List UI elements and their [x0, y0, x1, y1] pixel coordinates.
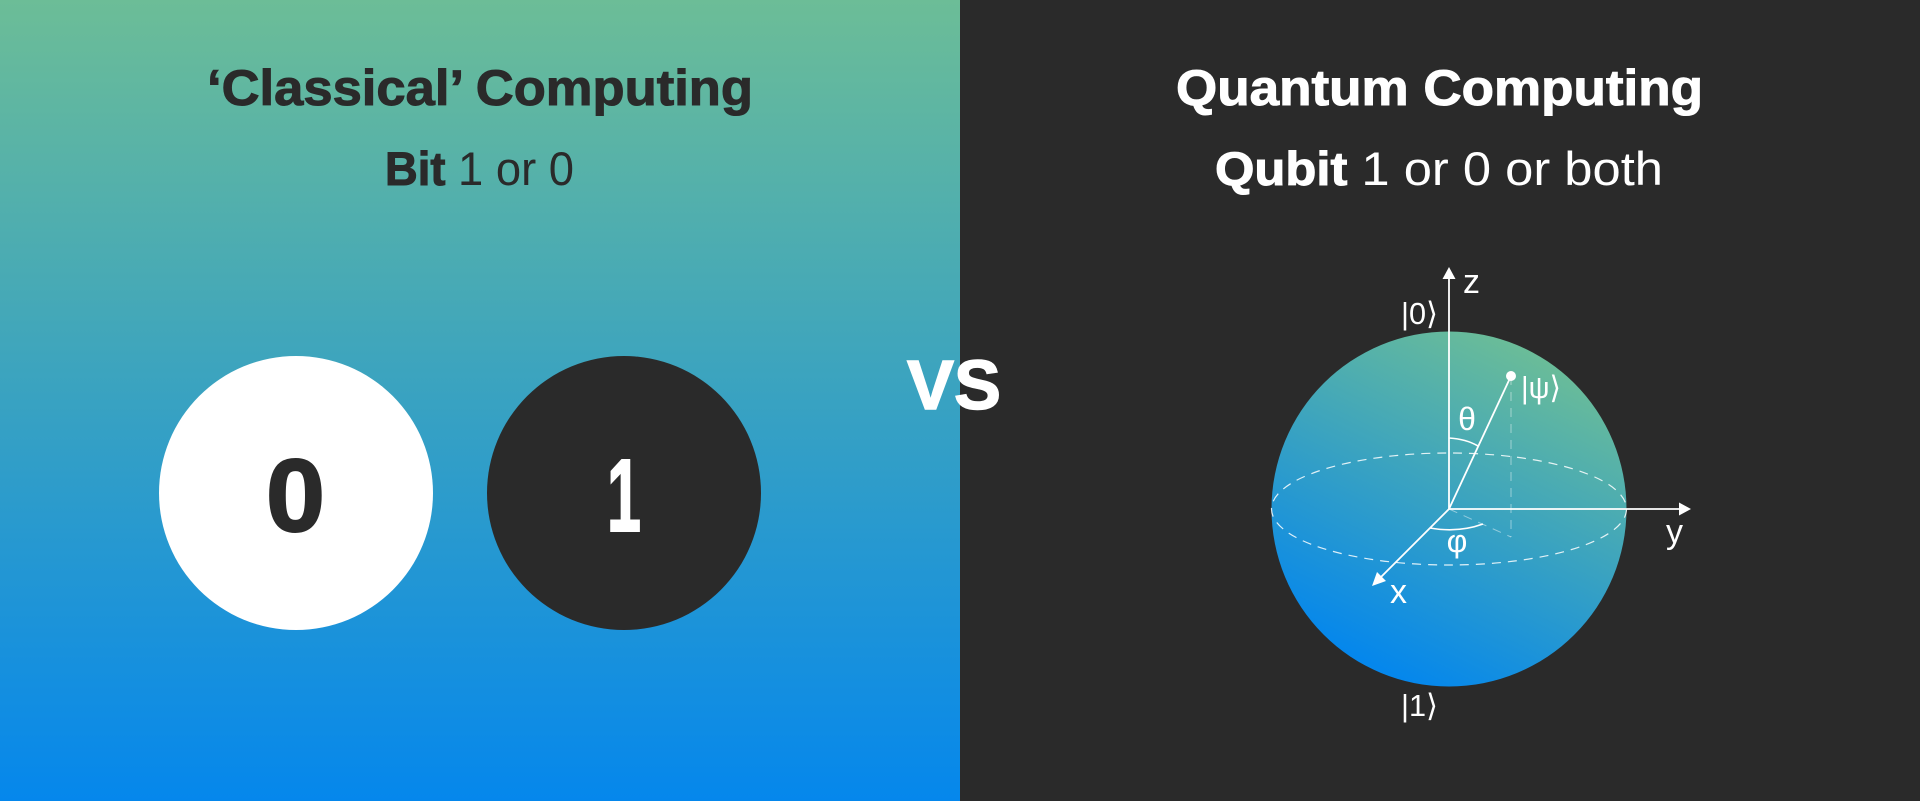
label: x: x [1390, 573, 1407, 611]
bit state circle: 1 [487, 356, 761, 630]
heading: classical computing: ‘Classical’ Computing [207, 60, 753, 116]
angle arc: theta [1449, 438, 1478, 446]
bit state circle: 0 [159, 356, 433, 630]
bit state circle: 0: 0 [266, 438, 325, 553]
axis arrow: y [1449, 502, 1691, 516]
panel: quantum computing [960, 0, 1920, 801]
heading: quantum computing: Quantum Computing [1176, 60, 1703, 116]
subheading: qubit: Qubit 1 or 0 or both [1215, 142, 1663, 195]
label: vs: VS [907, 346, 1001, 424]
label: ket 0: |0⟩ [1401, 296, 1438, 331]
panel: classical computing [0, 0, 960, 801]
label: theta: θ [1458, 401, 1476, 437]
label: phi: φ [1447, 523, 1467, 559]
label: ket 1: |1⟩ [1401, 688, 1438, 723]
axis arrow: z [1442, 267, 1456, 509]
bit state circle: 1: 1 [607, 438, 641, 553]
subheading: bit: Bit 1 or 0 [385, 142, 574, 195]
axis arrow: x [1372, 509, 1449, 586]
state vector [1449, 371, 1516, 509]
bloch sphere diagram [1272, 263, 1691, 723]
label: z: z [1463, 263, 1480, 301]
label: y: y [1666, 513, 1683, 551]
angle arc: phi [1430, 524, 1483, 530]
label: ket psi: |ψ⟩ [1521, 370, 1561, 405]
